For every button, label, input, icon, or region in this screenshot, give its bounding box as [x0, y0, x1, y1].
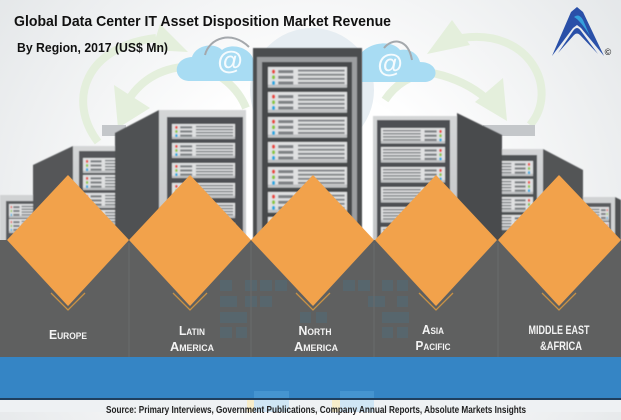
footer ghost blocks [247, 391, 374, 412]
recycling arrows, left [83, 24, 246, 142]
label: Asia Pacific: Pacific [416, 338, 451, 353]
label: Asia Pacific [416, 322, 451, 353]
label: Latin America: America [170, 339, 214, 354]
label: Asia Pacific: Asia [422, 322, 444, 337]
cloud: left [177, 38, 266, 81]
server: mid right [373, 113, 502, 245]
diamond: North America [252, 176, 373, 305]
connector bars [102, 125, 535, 136]
label: Middle East and Africa [528, 323, 590, 353]
cloud: right: @ [377, 48, 403, 78]
chevrons [51, 293, 576, 310]
title: Global Data Center IT Asset Disposition Market Revenue [14, 13, 391, 30]
label: Middle East and Africa: &AFRICA [540, 339, 582, 353]
band dividers [129, 243, 498, 357]
diamonds [8, 176, 620, 305]
label: Latin America: Latin [179, 323, 205, 338]
footer strip [0, 400, 621, 412]
diamond: Europe [8, 176, 128, 305]
label: North America: North [298, 323, 332, 338]
band ghost pattern [220, 280, 409, 338]
server: far right [583, 197, 621, 245]
cloud: right [362, 42, 436, 82]
label: Middle East and Africa: MIDDLE EAST [528, 323, 590, 337]
blue band dark edge [0, 398, 621, 400]
blue band [0, 357, 621, 398]
cloud: left: @ [217, 45, 243, 75]
logo: © [605, 47, 612, 57]
server: left [33, 146, 153, 245]
server racks [0, 48, 621, 245]
subtitle: By Region, 2017 (US$ Mn) [17, 40, 168, 55]
label: North America: America [294, 339, 338, 354]
recycling arrows, right [385, 20, 542, 125]
diamond: Latin America [130, 176, 250, 305]
server: far left [0, 195, 48, 245]
logo [552, 7, 612, 57]
server: mid left [115, 110, 246, 245]
server: right [465, 149, 583, 245]
region labels [49, 322, 590, 354]
grey band [0, 240, 621, 357]
diamond: Asia Pacific [376, 176, 496, 305]
diamond: Middle East and Africa [499, 176, 620, 305]
label: Latin America [170, 323, 214, 354]
label: North America [294, 323, 338, 354]
server: center [253, 48, 362, 245]
globe [250, 28, 374, 152]
label: Europe: Europe [49, 327, 87, 342]
